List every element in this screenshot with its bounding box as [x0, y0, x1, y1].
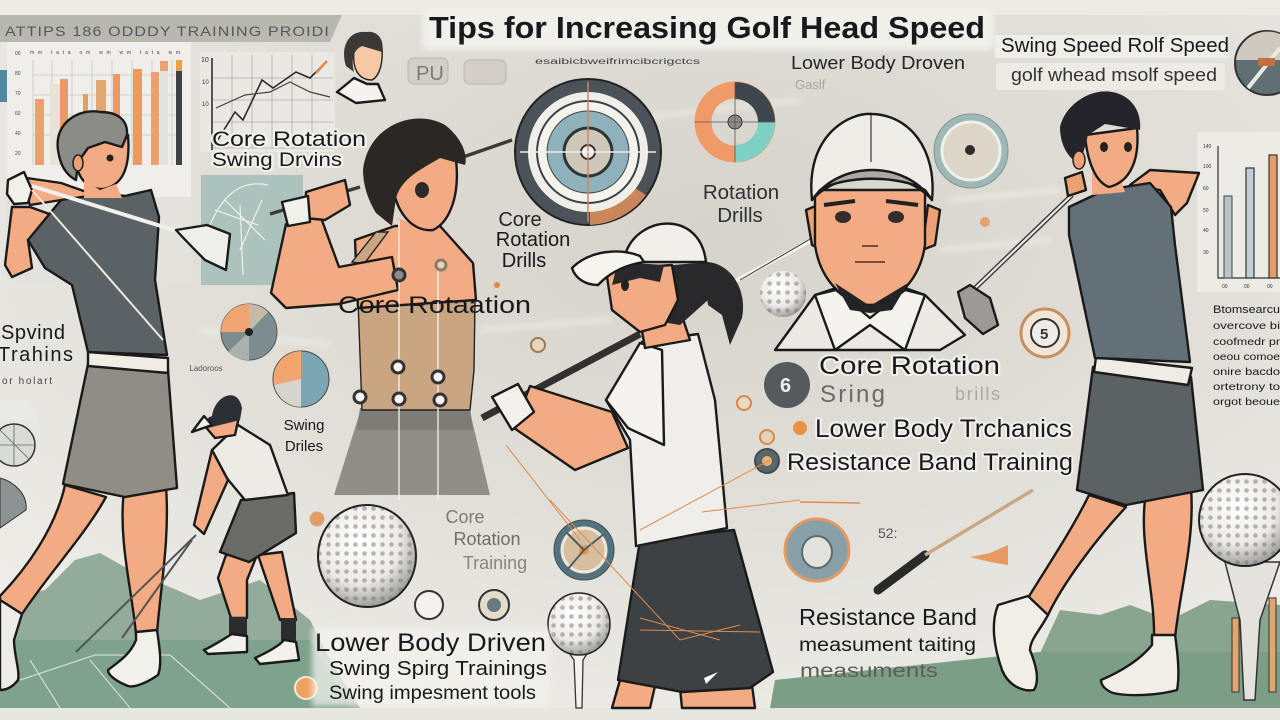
icon: number badge 5: 5: [1040, 326, 1048, 343]
label: lower body mechanics: Lower Body Trchanics: [815, 415, 1072, 443]
label: core rotation list: brills: [955, 384, 1000, 404]
label: core rotation drills: Drills: [502, 250, 546, 272]
club: [32, 186, 180, 232]
ear: [1073, 151, 1085, 169]
neck: [84, 180, 122, 198]
text block: right column: oeou comoe: [1213, 352, 1280, 363]
arm: [271, 215, 398, 308]
left sock and shoe: [0, 600, 22, 690]
front shoe: [994, 596, 1048, 690]
strap: [352, 232, 388, 264]
panel: bar chart: 60: [15, 111, 21, 117]
panel: right bar chart: 50: [1203, 208, 1209, 214]
panel: right bar chart: [1197, 132, 1280, 292]
label: number: 52:: [878, 525, 897, 541]
label: lower body driven: Lower Body Droven: [791, 53, 965, 73]
glove: [492, 384, 534, 430]
ponytail: [702, 262, 743, 345]
label: lower body driven: [791, 53, 965, 92]
arm: [1130, 170, 1199, 215]
arm: [5, 207, 52, 277]
label: core rotation training: Rotation: [453, 529, 521, 549]
hair: [1060, 91, 1140, 165]
heading: swing speed: golf whead msolf speed: [1011, 65, 1217, 85]
label: core rotation list: Sring: [820, 381, 885, 408]
label: spvind trahins: Spvind: [1, 322, 65, 344]
right leg: [123, 486, 167, 634]
panel: right bar chart: 40: [1203, 228, 1209, 234]
label: core rotation list: [819, 352, 1000, 408]
label: swing drills: Swing: [284, 417, 324, 434]
icon: small bust: [337, 32, 385, 103]
top-left banner: [0, 15, 342, 42]
label: swing drills: [189, 364, 324, 455]
neck: [398, 218, 440, 250]
shirt: [775, 288, 965, 350]
panel: right bar chart: 60: [1203, 186, 1209, 192]
panel: bar chart: mm tata om wm wm tata wm: [30, 50, 180, 56]
mouth and nose: [855, 246, 885, 262]
ears: [806, 205, 940, 250]
skirt: [334, 412, 490, 495]
icon: ball mid: [760, 271, 806, 317]
cap: [626, 224, 706, 262]
text block: right column: [1213, 304, 1280, 408]
panel: bar chart: 80: [15, 71, 21, 77]
text block: right column: Btomsearcu: [1213, 304, 1280, 316]
skirt: [618, 530, 773, 692]
brows: [824, 201, 918, 205]
label: lower body driven: Gaslf: [795, 77, 826, 92]
club shaft: [700, 240, 812, 300]
icon: number badge 5: [1021, 309, 1069, 357]
panel: bar chart: 40: [15, 131, 21, 137]
widget: faded labels: PU: [416, 63, 444, 85]
label: resistance band measurements: Resistance Band: [799, 604, 977, 630]
chest: [355, 226, 476, 308]
cap brim: [812, 170, 932, 200]
label: lower body driven list: Lower Body Driven: [315, 629, 546, 657]
shorts: [1077, 367, 1203, 505]
icon: small orange marker: [980, 217, 990, 227]
back leg: [1144, 488, 1192, 638]
swoosh: [704, 672, 718, 684]
heading: core rotation swing drills: [212, 127, 366, 171]
jaw shadow: [835, 283, 908, 313]
hair: [640, 262, 708, 325]
label: swing drills: Driles: [285, 438, 323, 455]
chart: target gauge: [515, 79, 661, 225]
panel: bar chart: 20: [15, 151, 21, 157]
label: rotation drills: [703, 181, 779, 227]
tan top: [358, 300, 475, 410]
panel: bar chart: 00: [15, 51, 21, 57]
label: resistance band measurements: measument taiting: [799, 635, 976, 656]
label: core rotation drills: [496, 209, 570, 272]
arms: [514, 386, 628, 470]
text block: right column: onire bacdo: [1213, 367, 1280, 378]
panel: right bar chart: 100: [1203, 164, 1212, 170]
panel: line chart: 10: [202, 102, 209, 108]
text block: right column: overcove bi: [1213, 321, 1280, 332]
text block: right column: orgot beoue: [1213, 397, 1280, 408]
label: resistance band measurements: measuments: [800, 661, 938, 682]
collar: [815, 290, 925, 350]
left leg: [0, 485, 106, 614]
legs: [612, 680, 755, 708]
heading: swing speed: Swing Speed Rolf Speed: [1001, 35, 1229, 57]
figure: golfer left: [0, 111, 230, 690]
sleeve: [606, 343, 664, 445]
text block: right column: ortetrony to: [1213, 382, 1280, 393]
chart: small orange dial: [554, 520, 614, 580]
label: core rotation drills: Core: [498, 209, 542, 231]
hair: [58, 111, 127, 180]
panel: right bar chart: 00: [1244, 284, 1250, 290]
hair: [363, 119, 466, 226]
measurement markers: [354, 260, 446, 406]
club: [968, 195, 1072, 295]
label: resistance band training: Resistance Band Training: [787, 449, 1073, 476]
label: spvind trahins: Trahins: [0, 344, 73, 366]
right shoe: [108, 630, 160, 686]
panel: right bar chart: 30: [1203, 250, 1209, 256]
back shoe: [1101, 635, 1178, 695]
figure: right golfer: [958, 91, 1203, 695]
annotation lines: orange: [506, 445, 860, 640]
heading: core rotation swing drills: Swing Drvins: [212, 150, 342, 171]
icon: small markers: [295, 282, 545, 699]
panel: line chart: 10: [201, 57, 209, 64]
front leg: [1028, 495, 1126, 615]
label: core rotation: Core Rotaation: [338, 292, 531, 319]
panel: right bar chart: 140: [1203, 144, 1212, 150]
figure: small golfer: [76, 395, 299, 664]
club grip: [482, 334, 640, 418]
cap brim: [572, 252, 644, 285]
label: core rotation list: Core Rotation: [819, 352, 1000, 380]
icon: tee pegs: [1232, 598, 1276, 692]
face: [815, 190, 925, 305]
chart: pie bottom: [273, 351, 329, 407]
club head: [176, 225, 230, 270]
chart: pie top: [221, 304, 277, 360]
icon: big teed ball right: [1199, 474, 1280, 700]
face: [606, 265, 678, 332]
neck: [1092, 172, 1125, 195]
label: spvind trahins: or holart: [2, 376, 52, 387]
panel: line chart: [200, 52, 335, 152]
label: core rotation training: Core: [445, 507, 485, 527]
icon: club illustration: [878, 490, 1033, 590]
label: rotation drills: Rotation: [703, 181, 779, 204]
panel: line chart: 10: [202, 80, 209, 86]
widget: faded labels: [408, 57, 700, 85]
ear: [73, 155, 83, 171]
chart: pale dial: [934, 114, 1008, 188]
ground: left course: [0, 553, 360, 708]
icon: left sliver circles: [0, 400, 40, 528]
face: [1085, 128, 1138, 187]
shirt: [28, 190, 167, 355]
panel: right bar chart: 00: [1267, 284, 1273, 290]
glove: [7, 172, 32, 204]
icon: speedometer: [1235, 31, 1280, 95]
head: [77, 125, 128, 189]
title: Tips for Increasing Golf Head Speed: [429, 10, 985, 45]
figure: centre woman golfer: [482, 224, 812, 708]
cap: [811, 114, 933, 200]
forearm band: [20, 177, 95, 205]
club head: [958, 285, 998, 334]
ground: right course: [770, 600, 1280, 708]
icon: marker dots: 6: [780, 375, 791, 397]
head: [392, 150, 457, 230]
glove: [282, 196, 310, 226]
icon: teed ball: [548, 593, 610, 708]
panel: right bar chart: 00: [1222, 284, 1228, 290]
icon: large golf ball: [318, 505, 416, 607]
label: core rotation drills: Rotation: [496, 229, 570, 251]
chart: ring: [785, 519, 849, 581]
top-left banner: ATTIPS 186 ODDDY TRAINING PROIDI: [5, 23, 330, 39]
panel: teal map: [201, 175, 303, 285]
text block: right column: coofmedr pr: [1213, 337, 1280, 348]
side sliver of landscape: [0, 70, 7, 102]
widget: faded labels: esaibicbweifrimcibcrigctcs: [535, 57, 700, 66]
label: lower body driven list: [312, 628, 550, 706]
eyes: [835, 211, 851, 223]
shirt: [1069, 183, 1190, 362]
heading: core rotation swing drills: Core Rotation: [212, 127, 366, 151]
icon: marker dots: [737, 362, 810, 473]
club shaft: [270, 140, 512, 214]
label: resistance band measurements: [799, 604, 977, 682]
label: rotation drills: Drills: [717, 204, 763, 227]
skirt waistband: [357, 408, 473, 430]
hands: [1065, 172, 1086, 196]
label: core rotation training: [445, 507, 527, 573]
label: swing drills: Ladoroos: [189, 364, 223, 373]
label: spvind trahins: [0, 322, 73, 387]
label: core rotation training: Training: [463, 553, 527, 573]
chart: donut: [695, 82, 775, 162]
belt: [88, 352, 168, 373]
measurement lines: [399, 220, 438, 500]
panel: bar chart: [7, 42, 191, 282]
shirt: [606, 334, 727, 546]
heading: swing speed: [995, 35, 1229, 90]
neck: [640, 310, 690, 348]
belt: [1094, 357, 1192, 385]
panel: bar chart: 70: [15, 91, 21, 97]
label: lower body driven list: Swing Spirg Trainings: [329, 658, 547, 680]
figure: centre man portrait: [775, 114, 965, 350]
hands: [305, 180, 350, 220]
figure: golfer with club behind head: [270, 119, 512, 500]
label: lower body driven list: Swing impesment tools: [329, 683, 536, 704]
shorts: [63, 364, 177, 497]
